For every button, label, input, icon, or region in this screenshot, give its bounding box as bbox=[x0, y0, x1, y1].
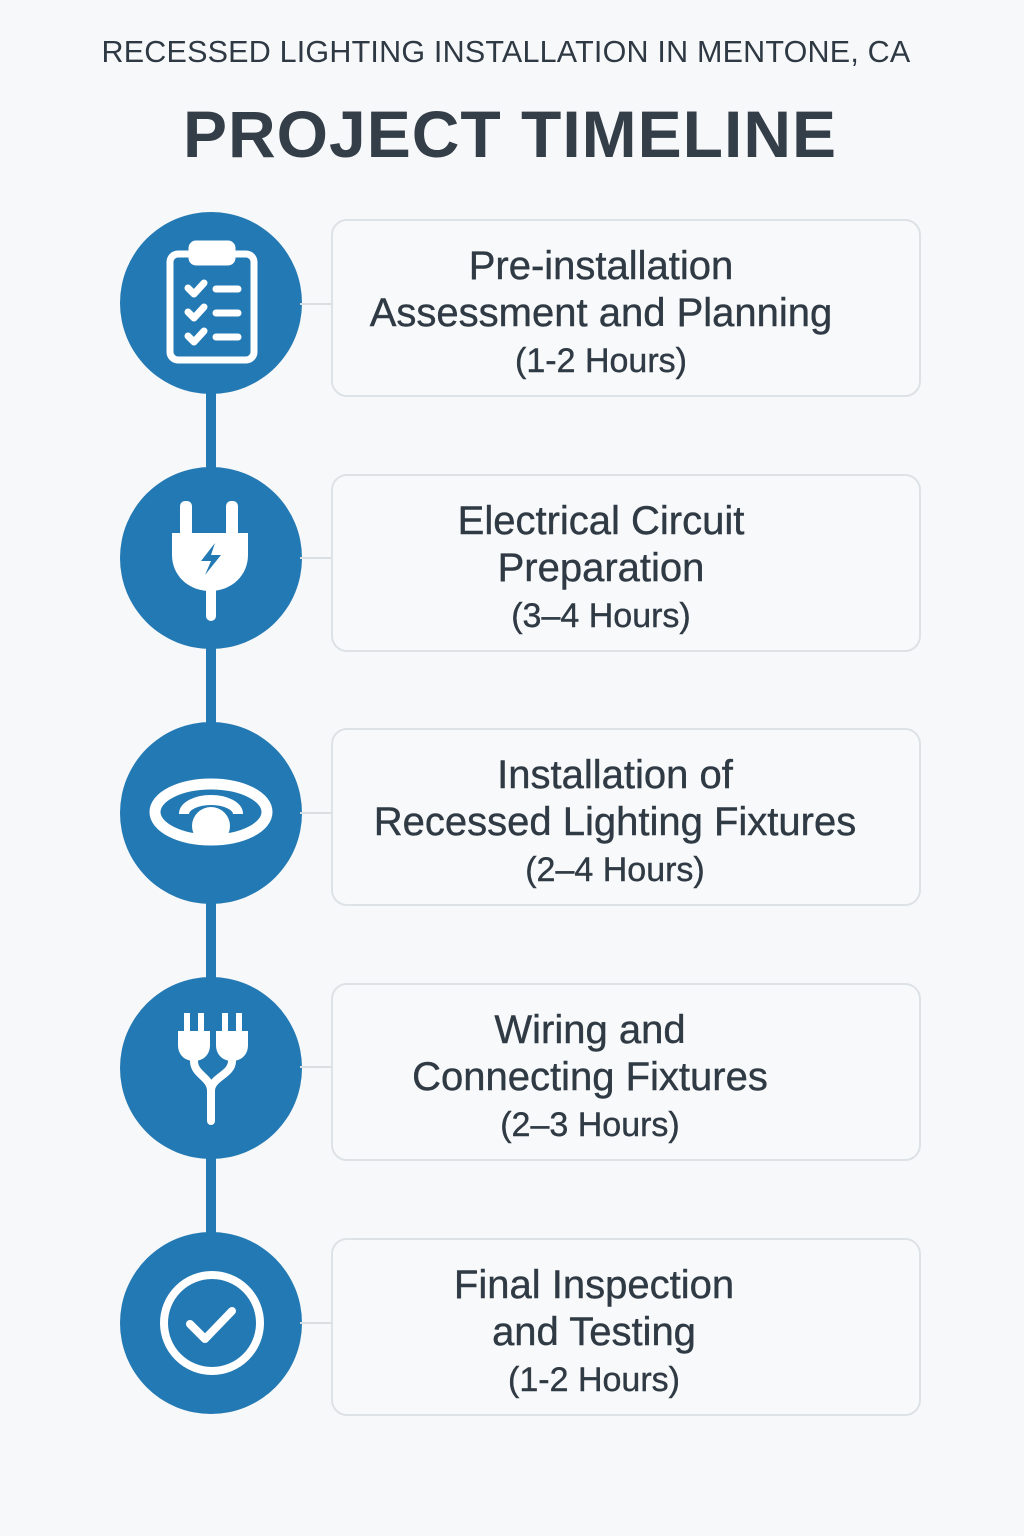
card 5 bbox=[331, 1238, 921, 1416]
timeline line bbox=[206, 300, 216, 1320]
card 3 bbox=[331, 728, 921, 906]
card 1: (1-2 Hours) bbox=[515, 342, 687, 380]
card 4: Connecting Fixtures bbox=[412, 1055, 768, 1099]
card 5: (1-2 Hours) bbox=[508, 1361, 680, 1399]
connector bbox=[300, 812, 332, 814]
icon: wiring bbox=[120, 977, 302, 1159]
card 1 bbox=[331, 219, 921, 397]
card 2: (3–4 Hours) bbox=[511, 597, 691, 635]
connector bbox=[300, 557, 332, 559]
connector bbox=[300, 1066, 332, 1068]
card 2: Preparation bbox=[498, 546, 704, 590]
card 5: Final Inspection bbox=[454, 1263, 734, 1307]
subtitle: RECESSED LIGHTING INSTALLATION IN MENTONE, CA bbox=[102, 35, 910, 69]
card 4: Wiring and bbox=[494, 1008, 686, 1052]
card 5: and Testing bbox=[492, 1310, 696, 1354]
card 3: (2–4 Hours) bbox=[525, 851, 705, 889]
icon: plug bbox=[120, 467, 302, 649]
card 3: Installation of bbox=[497, 753, 733, 797]
card 3: Recessed Lighting Fixtures bbox=[374, 800, 856, 844]
icon: clipboard bbox=[120, 212, 302, 394]
card 2 bbox=[331, 474, 921, 652]
card 1: Pre-installation bbox=[469, 244, 733, 288]
title: PROJECT TIMELINE bbox=[183, 97, 837, 171]
icon: recessed light bbox=[120, 722, 302, 904]
connector bbox=[300, 303, 332, 305]
card 2: Electrical Circuit bbox=[458, 499, 744, 543]
card 4: (2–3 Hours) bbox=[500, 1106, 680, 1144]
icon: check bbox=[120, 1232, 302, 1414]
card 1: Assessment and Planning bbox=[370, 291, 832, 335]
connector bbox=[300, 1322, 332, 1324]
card 4 bbox=[331, 983, 921, 1161]
